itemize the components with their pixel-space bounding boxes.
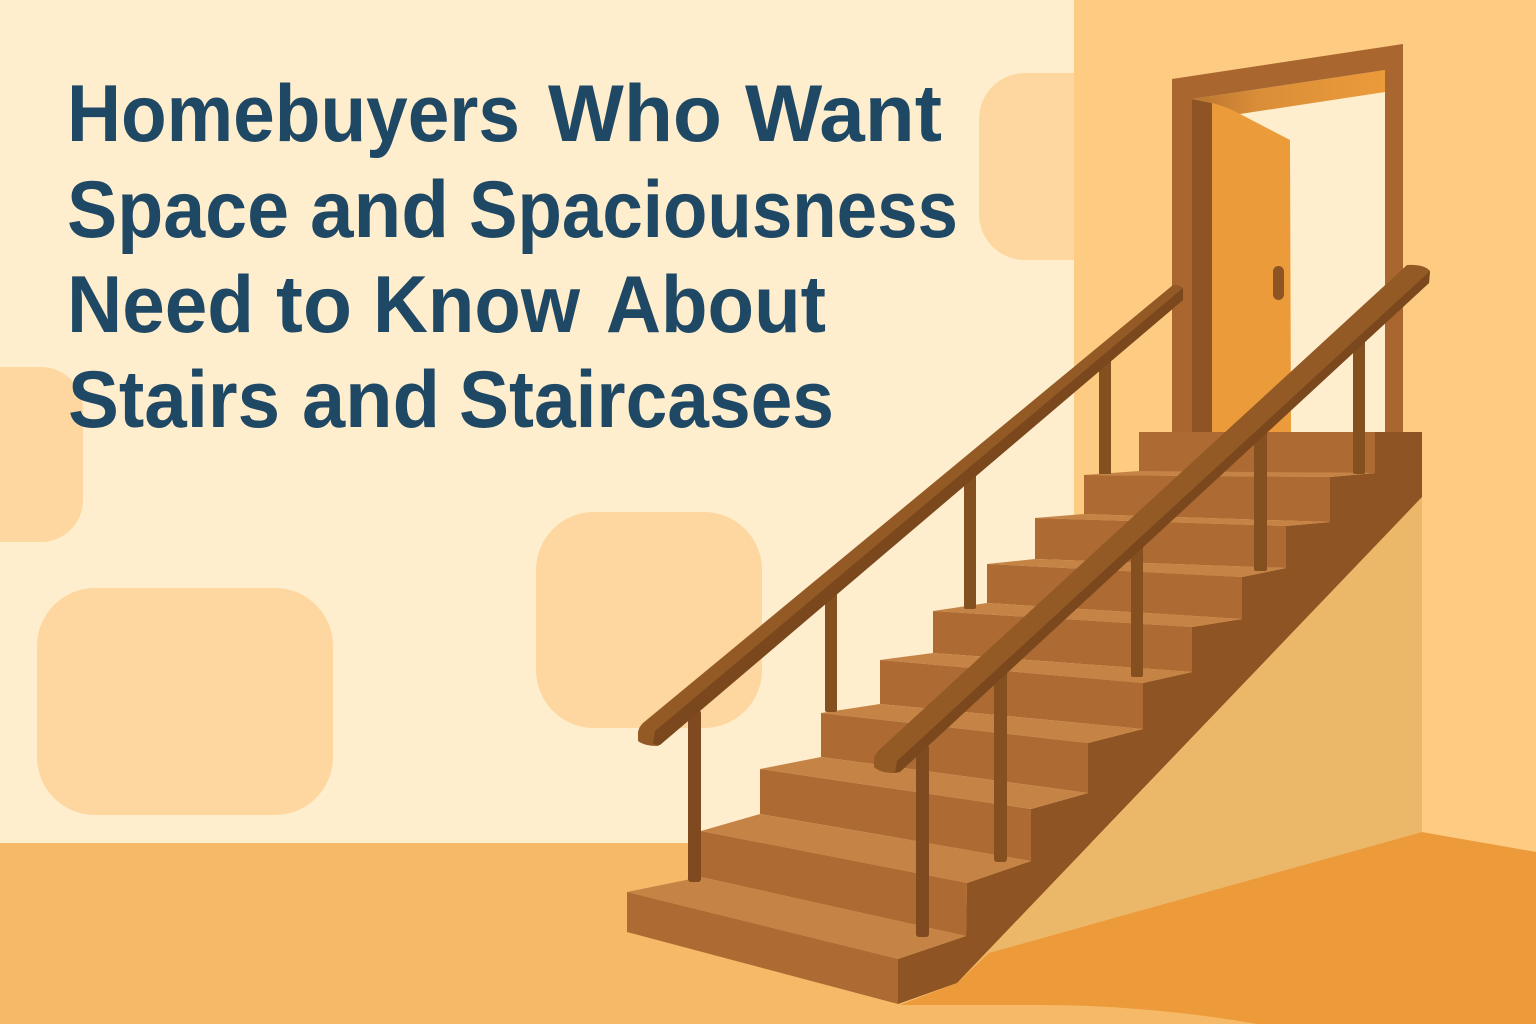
decorative blob: left edge — [0, 367, 83, 542]
step 1 riser — [627, 892, 898, 1004]
title: and — [310, 165, 449, 255]
near rail underside — [895, 271, 1430, 773]
decorative blob: top by wall — [979, 73, 1139, 260]
open doorway — [1172, 44, 1403, 432]
door handle — [1273, 266, 1284, 300]
title: Want — [745, 69, 942, 159]
step 4 riser — [821, 713, 1088, 793]
orange floor — [900, 832, 1536, 1024]
title: Spaciousness — [469, 165, 958, 255]
step 8 tread — [1035, 514, 1330, 526]
step 9 tread — [1084, 471, 1375, 477]
title: Stairs — [68, 355, 280, 445]
step 8 riser — [1035, 518, 1286, 568]
door jamb — [1192, 99, 1212, 432]
right wall — [1074, 0, 1536, 852]
title: Who — [548, 69, 722, 159]
step 6 tread — [933, 603, 1242, 627]
decorative blob: centre — [536, 512, 762, 728]
title — [67, 69, 958, 445]
title: About — [606, 260, 826, 350]
step 1 tread — [627, 877, 966, 959]
door opening light — [1192, 70, 1385, 432]
step 6 riser — [933, 611, 1192, 672]
far handrail — [638, 285, 1183, 882]
near handrail — [874, 265, 1430, 937]
under-stair wall — [957, 497, 1422, 984]
step 3 riser — [760, 769, 1031, 861]
title: Need — [67, 260, 254, 350]
step 9 riser — [1084, 475, 1330, 522]
door frame — [1172, 44, 1403, 432]
door lintel shadow — [1192, 70, 1385, 114]
step 5 tread — [880, 653, 1192, 683]
step 2 tread — [701, 814, 1031, 883]
title: Know — [373, 260, 581, 350]
step 4 tread — [821, 704, 1143, 743]
near balusters — [1353, 340, 1365, 474]
step 7 tread — [987, 559, 1286, 577]
staircase — [627, 432, 1422, 1004]
step 5 riser — [880, 660, 1143, 729]
step 2 riser — [701, 831, 967, 936]
step 7 riser — [987, 564, 1242, 619]
title: Space — [67, 165, 289, 255]
near rail top and end face — [874, 265, 1430, 773]
step 10 riser — [1139, 432, 1375, 473]
title: and — [302, 355, 440, 445]
door leaf — [1212, 103, 1291, 432]
floor — [0, 843, 1536, 1024]
title: Staircases — [459, 355, 834, 445]
stair side stringer — [898, 432, 1422, 1004]
decorative blob: bottom left — [37, 588, 333, 815]
title: to — [276, 260, 352, 350]
far balusters — [1099, 360, 1111, 474]
far rail underside — [653, 288, 1183, 745]
far rail top and end face — [638, 285, 1183, 746]
title: Homebuyers — [67, 69, 520, 159]
step 3 tread — [760, 757, 1088, 809]
